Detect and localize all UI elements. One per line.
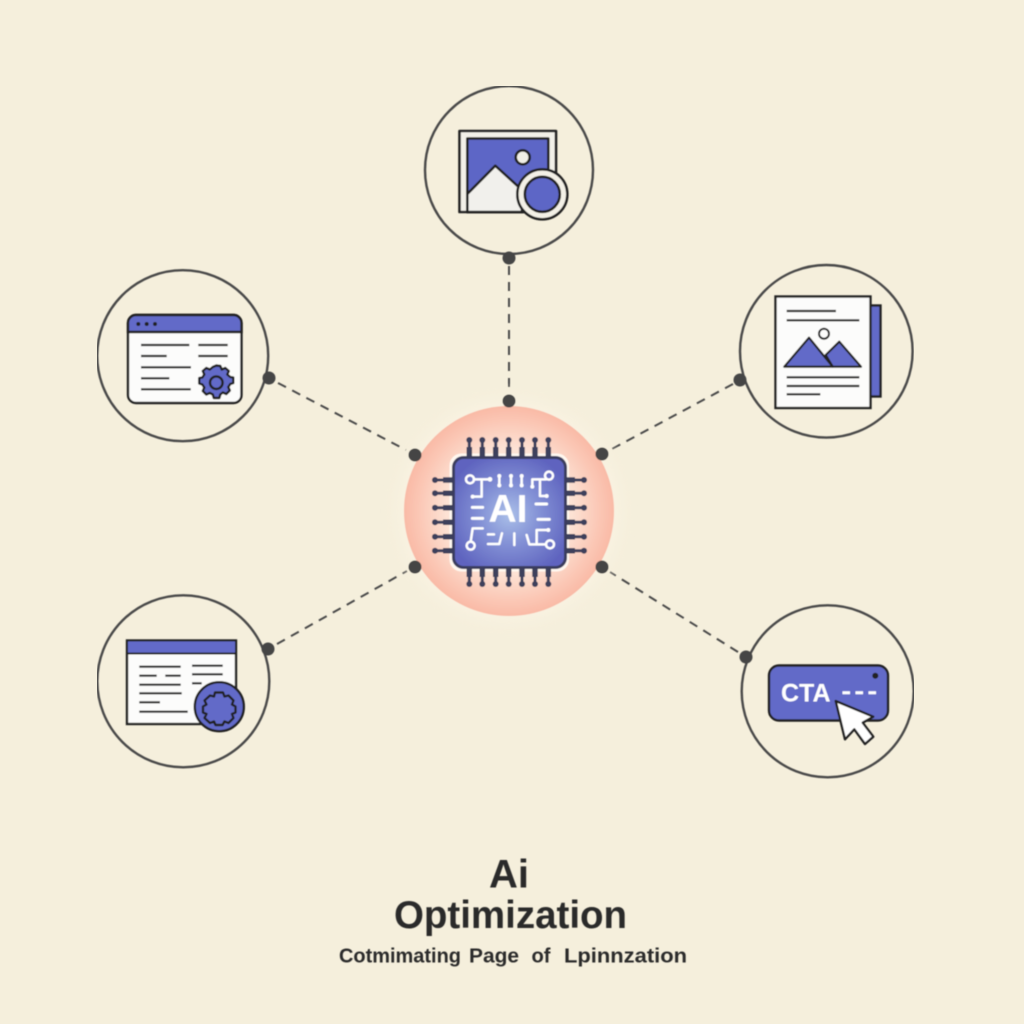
node: call to action [742,605,914,777]
title: Optimization [394,894,627,937]
icon: CTA button [769,666,888,720]
icon: page with gear badge [127,640,244,731]
CTA label: CTA [781,680,831,708]
subtitle [339,946,687,968]
title: Ai [489,852,529,896]
chip circuit traces [466,472,554,550]
subtitle: Lpinnzation [564,946,687,968]
chip pins [432,437,587,587]
chip label: AI [488,488,528,531]
subtitle: Cotmimating [339,946,461,968]
icon: cursor [836,701,873,744]
title [394,852,627,937]
node: web page settings [97,270,268,441]
icon: document with mountains [776,296,880,408]
central hub: AI chip [381,383,637,639]
subtitle: Page [469,946,519,968]
connector nodes [262,252,752,664]
subtitle: of [532,946,551,968]
node: content document [740,265,913,438]
node: image optimisation [425,86,593,254]
icon: browser window with gear [128,315,242,403]
node: page layout settings [97,595,269,767]
button dashes [842,691,877,694]
button dot [872,673,878,679]
connector lines [277,266,738,652]
icon: picture frame with lens [460,131,567,219]
chip body [454,458,566,568]
